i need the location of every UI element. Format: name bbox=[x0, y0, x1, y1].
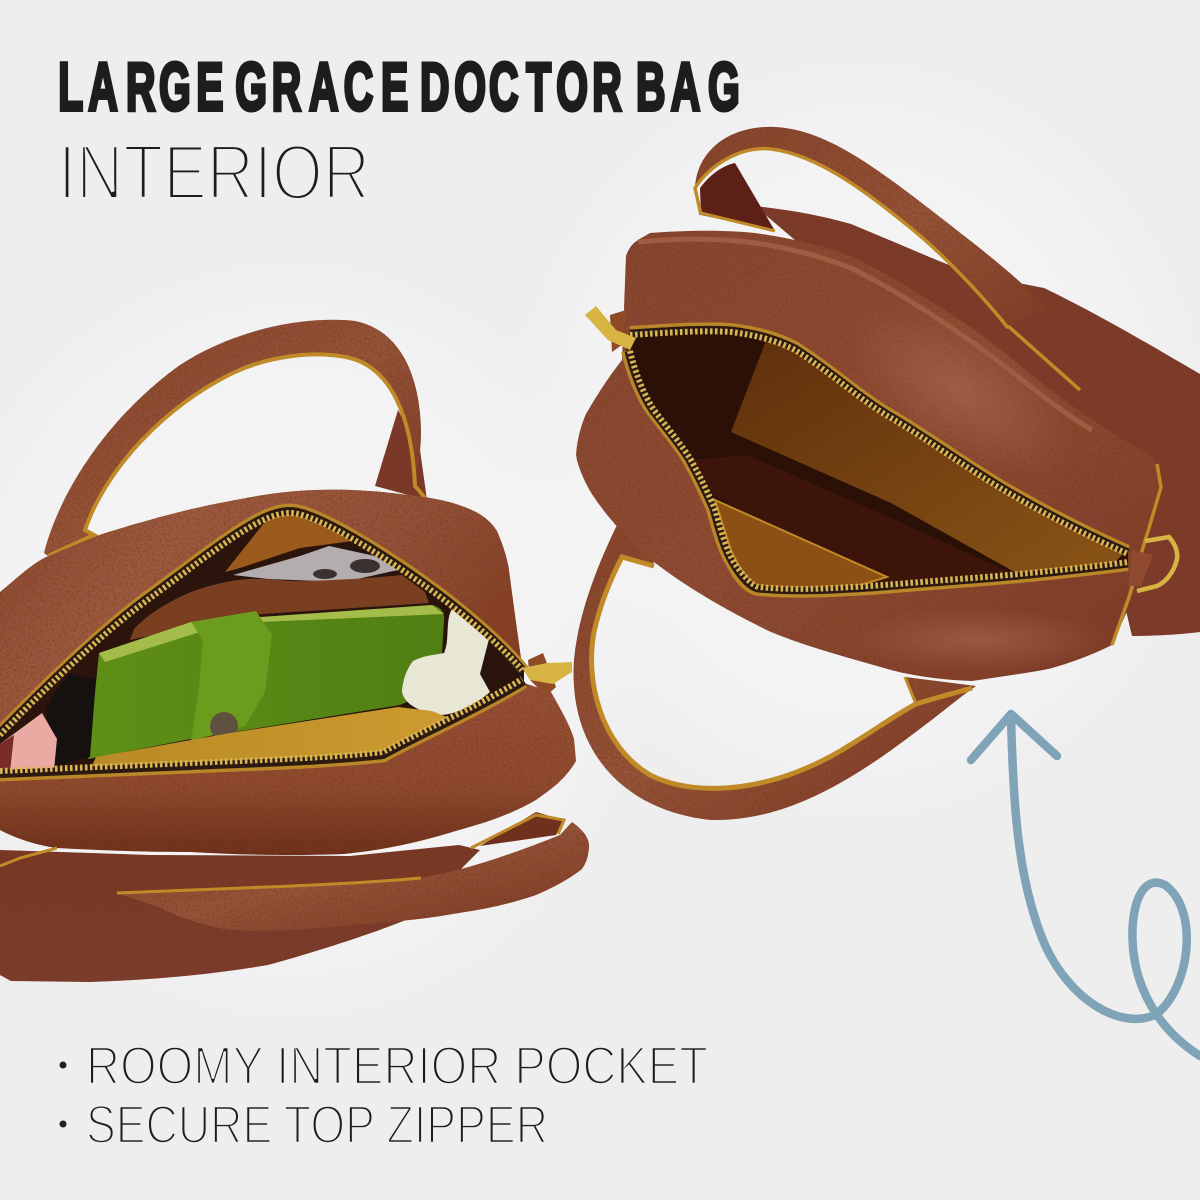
side seam bbox=[1112, 464, 1161, 645]
mustard pouch bbox=[90, 707, 459, 770]
top handle bbox=[695, 127, 1061, 370]
lower body bbox=[0, 845, 480, 982]
top seam bbox=[638, 239, 1092, 430]
d-ring bbox=[1128, 537, 1177, 591]
back body panel bbox=[755, 206, 1200, 636]
back handle bbox=[44, 320, 427, 556]
upper tan lining bbox=[225, 514, 360, 572]
heading: interior: INTERIOR bbox=[58, 128, 370, 216]
arrow bbox=[971, 714, 1200, 1056]
title bbox=[58, 48, 740, 216]
zipper pull bbox=[585, 306, 636, 352]
white scrunchie bbox=[402, 609, 490, 715]
bullet list bbox=[60, 1036, 708, 1155]
handle end strap bbox=[1008, 310, 1080, 392]
wallet top edge bbox=[99, 605, 444, 662]
tan back lining bbox=[731, 338, 1125, 575]
right bag photo: empty open bag bbox=[573, 127, 1200, 820]
leather highlight: top panel bbox=[818, 269, 1102, 511]
lipstick bbox=[46, 674, 96, 766]
soft white glow behind bags bbox=[0, 100, 1170, 980]
dark pocket band bbox=[691, 455, 1020, 584]
green wallet bbox=[88, 605, 444, 759]
wallet strap bbox=[191, 611, 272, 741]
leather highlight: front panel bbox=[850, 608, 1110, 672]
zipper pull bbox=[522, 653, 572, 696]
front handle bbox=[117, 812, 589, 931]
zipper: right bag bbox=[626, 327, 1128, 593]
wallet snap bbox=[210, 712, 238, 740]
bag interior bbox=[626, 327, 1128, 593]
body seam bbox=[0, 848, 57, 866]
pink compact bbox=[0, 713, 57, 774]
lower handle bbox=[573, 523, 976, 820]
yellow strap edge bbox=[1008, 326, 1080, 390]
top panel of bag bbox=[0, 490, 522, 740]
front panel bbox=[0, 683, 576, 855]
bullet: roomy interior pocket: ROOMY INTERIOR POCKET bbox=[86, 1036, 708, 1096]
left bag photo: open bag with contents bbox=[0, 320, 589, 982]
bottom tan pocket bbox=[715, 500, 887, 588]
interior pocket band bbox=[130, 575, 429, 640]
phone in pocket bbox=[233, 546, 398, 582]
heading: product name: LARGE GRACE DOCTOR BAG bbox=[58, 48, 740, 125]
bullet: secure top zipper: SECURE TOP ZIPPER bbox=[86, 1095, 548, 1155]
main front body bbox=[576, 231, 1160, 681]
zipper: left bag bbox=[0, 509, 524, 776]
bag interior bbox=[0, 509, 524, 776]
